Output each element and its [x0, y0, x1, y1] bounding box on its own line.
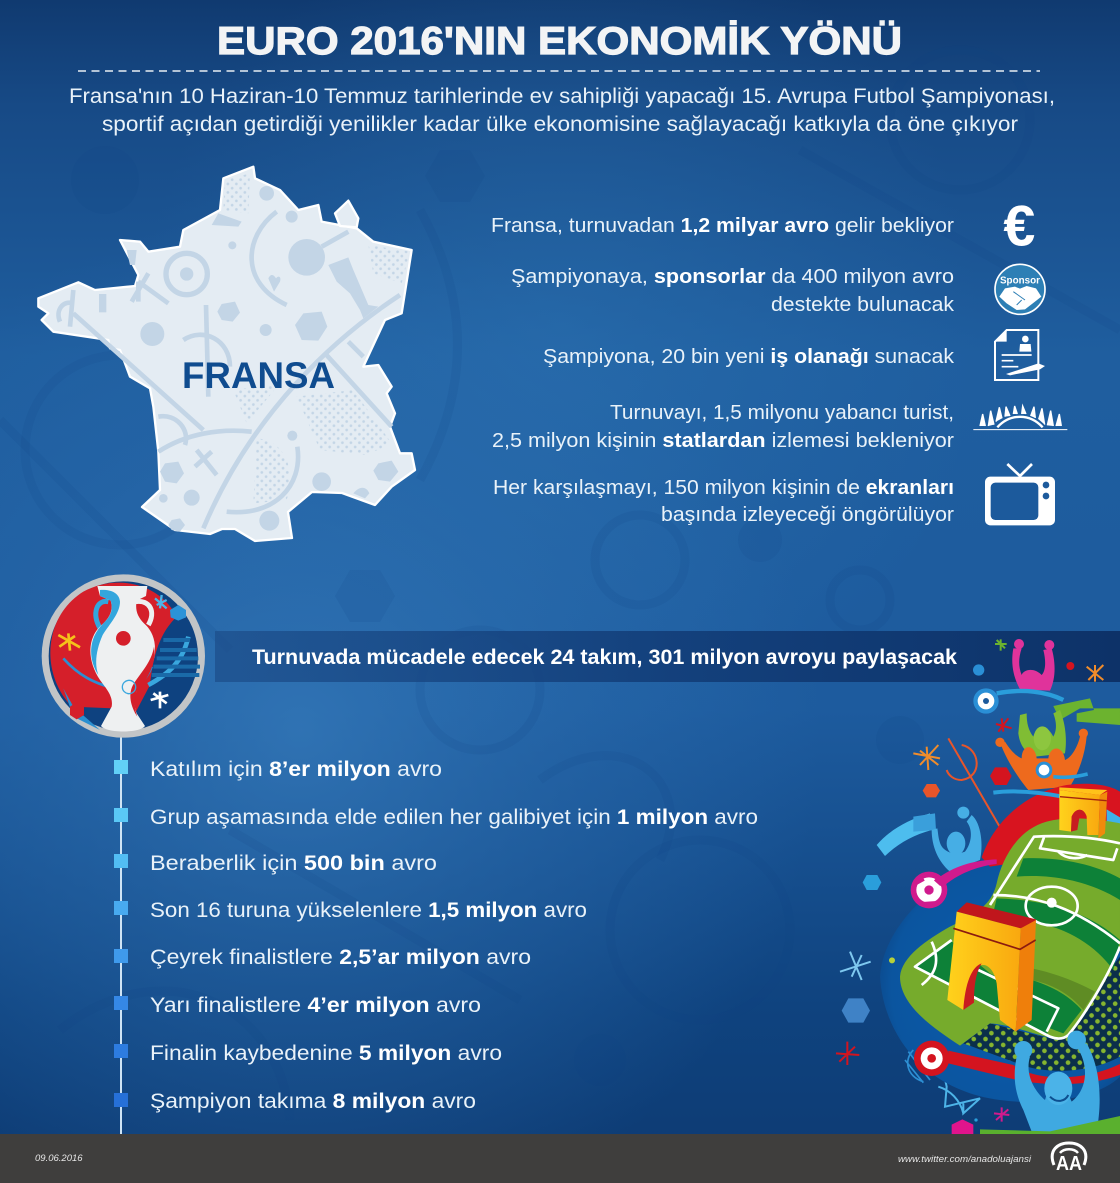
- footer link: www.twitter.com/anadoluajansi: [898, 1154, 1032, 1165]
- scarf: green: [1053, 698, 1120, 725]
- icon: television: [985, 464, 1055, 525]
- fact: stadiums: 2,5 milyon kişinin statlardan izlemesi bekleniyor: [492, 429, 954, 452]
- field lines lower left: [935, 1033, 980, 1113]
- red arc: [982, 784, 1120, 867]
- prize 3: Beraberlik için 500 bin avro: [150, 851, 437, 875]
- illustration: upper fans and confetti: [836, 639, 1120, 1065]
- icon: stadium: [973, 406, 1067, 430]
- prize 8: Şampiyon takıma 8 milyon avro: [150, 1089, 476, 1113]
- fact: stadiums: Turnuvayı, 1,5 milyonu yabancı turist,: [610, 401, 954, 424]
- blue ribbon across top: [993, 791, 1120, 830]
- arch: large: [947, 902, 1036, 1032]
- fact: sponsors: [511, 265, 955, 316]
- prize 1: Katılım için 8’er milyon avro: [150, 757, 442, 781]
- fact: screens: Her karşılaşmayı, 150 milyon kişinin de ekranları: [493, 476, 954, 499]
- fact: jobs: Şampiyona, 20 bin yeni iş olanağı sunacak: [543, 345, 955, 368]
- section band: [215, 631, 1120, 682]
- icon: job document: [995, 330, 1045, 380]
- divider: [78, 70, 1040, 72]
- prize 2: Grup aşamasında elde edilen her galibiyet için 1 milyon avro: [150, 805, 758, 829]
- fact: sponsors: Şampiyonaya, sponsorlar da 400 milyon avro: [511, 265, 954, 288]
- section band: Turnuvada mücadele edecek 24 takım, 301 milyon avroyu paylaşacak: [252, 646, 957, 669]
- arch: small: [1059, 787, 1107, 838]
- footer bar: [0, 1134, 1120, 1183]
- fact: revenue: Fransa, turnuvadan 1,2 milyar avro gelir bekliyor: [491, 214, 954, 237]
- fact: stadiums: [492, 401, 954, 452]
- fan: bottom blue: [980, 1031, 1120, 1134]
- ribbon and ball: red: [905, 1041, 1120, 1084]
- footer date: 09.06.2016: [35, 1153, 83, 1164]
- prize 6: Yarı finalistlere 4’er milyon avro: [150, 993, 481, 1017]
- prize 4: Son 16 turuna yükselenlere 1,5 milyon avro: [150, 898, 587, 922]
- ribbon and ball: magenta: [911, 859, 997, 908]
- fans: green and orange: [995, 710, 1088, 790]
- intro text: sportif açıdan getirdiği yenilikler kadar ülke ekonomisine sağlayacağı katkıyla da öne çıkıyor: [102, 113, 1018, 136]
- dark blue blob: [880, 860, 1120, 1102]
- dotted section: [963, 957, 1120, 1071]
- fact: screens: başında izleyeceği öngörülüyor: [661, 503, 954, 526]
- logo: Euro 2016 trophy: [42, 574, 205, 738]
- fan: magenta: [973, 639, 1063, 714]
- icons: [973, 194, 1067, 525]
- pitch: [900, 818, 1120, 1046]
- map: France: [38, 167, 415, 541]
- confetti shapes: [836, 639, 1103, 1065]
- icon: euro: €: [1003, 194, 1035, 258]
- illustration: lower stadium: [877, 784, 1120, 1134]
- prize list: [114, 735, 758, 1134]
- intro text: [69, 85, 1055, 136]
- fan: light blue with scarf: [877, 807, 982, 872]
- title: EURO 2016'NIN EKONOMİK YÖNÜ: [217, 20, 902, 63]
- intro text: Fransa'nın 10 Haziran-10 Temmuz tarihlerinde ev sahipliği yapacağı 15. Avrupa Futbol Şampiyonası,: [69, 85, 1055, 108]
- illustration: stadium and fans: [836, 639, 1120, 1134]
- fact: sponsors: destekte bulunacak: [771, 293, 955, 316]
- confetti lower: [889, 957, 1009, 1134]
- icon: sponsor handshake: [995, 264, 1045, 314]
- map label: FRANSA: [182, 355, 335, 396]
- icon: sponsor handshake: Sponsor: [1000, 275, 1040, 286]
- logo: Anadolu Agency: [1052, 1143, 1086, 1175]
- prize 7: Finalin kaybedenine 5 milyon avro: [150, 1041, 502, 1065]
- logo: Anadolu Agency: AA: [1056, 1153, 1082, 1175]
- fact: screens: [493, 476, 954, 526]
- facts list: [491, 214, 955, 526]
- prize 5: Çeyrek finalistlere 2,5’ar milyon avro: [150, 945, 531, 969]
